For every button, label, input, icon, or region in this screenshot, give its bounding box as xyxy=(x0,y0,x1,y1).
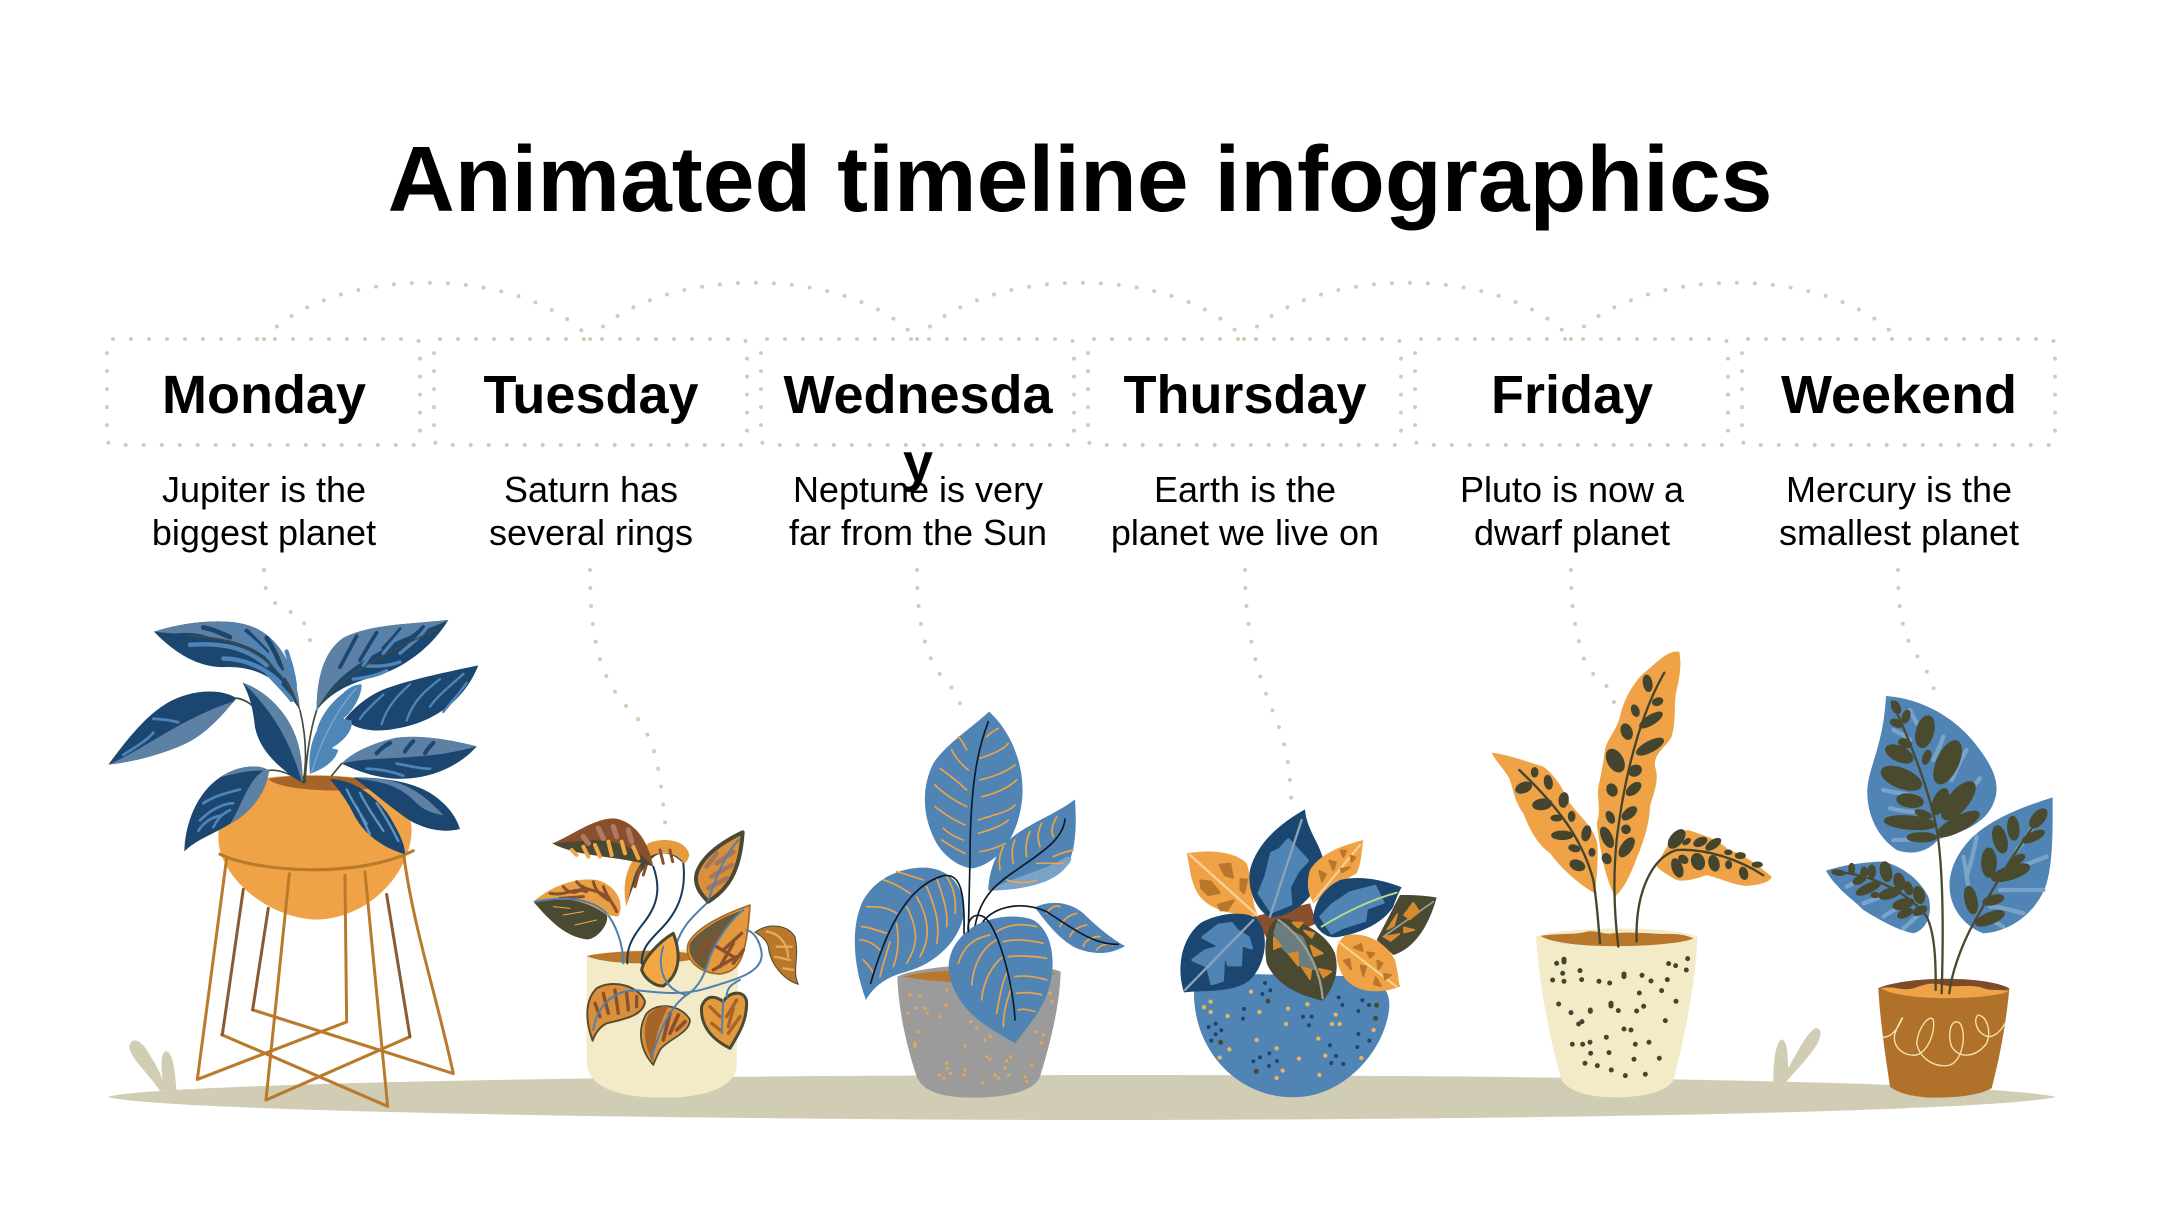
text: Weekend description: smallest planet xyxy=(1779,512,2019,553)
heading: Wednesday (wrapped): y xyxy=(903,433,933,493)
front leaf xyxy=(949,917,1053,1043)
text: Tuesday description: Saturn has xyxy=(504,469,678,510)
plant 5: orange wavy leaves in cream pot xyxy=(1492,652,1772,1097)
text: Thursday description: planet we live on xyxy=(1111,512,1379,553)
heading: Tuesday: Tuesday xyxy=(483,365,699,425)
dotted connectors from text to plants xyxy=(264,570,1938,840)
orange veins on back leaves xyxy=(860,728,1113,977)
leaves xyxy=(1826,696,2053,933)
pot: grey speckled xyxy=(897,965,1061,1098)
text: Monday description: Jupiter is the xyxy=(162,469,366,510)
stems xyxy=(1519,673,1763,947)
pot swirl decoration xyxy=(1883,1015,2005,1066)
pot: cream xyxy=(587,949,738,1098)
pot: cream speckled xyxy=(1536,929,1697,1097)
pot: orange bowl xyxy=(218,775,412,920)
leaves xyxy=(533,818,798,1065)
heading: Monday: Monday xyxy=(162,365,366,425)
dotted arcs connecting the days xyxy=(264,283,1898,339)
light leaf stripes xyxy=(1847,710,2047,928)
pot speckles xyxy=(1204,992,1374,1078)
black stems xyxy=(871,722,1118,983)
text: Weekend description: Mercury is the xyxy=(1786,469,2012,510)
plant 2: trailing orange-brown pothos in cream pot xyxy=(533,818,798,1098)
plant 6: blue leaves in terracotta pot xyxy=(1826,696,2053,1098)
heading: Thursday: Thursday xyxy=(1123,365,1367,425)
text: Tuesday description: several rings xyxy=(489,512,693,553)
text: Friday description: Pluto is now a xyxy=(1460,469,1684,510)
trailing blue vines xyxy=(535,840,762,1057)
stems xyxy=(1833,702,2043,993)
text: Friday description: dwarf planet xyxy=(1474,512,1670,553)
plant 1: navy leaves in orange pot on wire stand xyxy=(108,620,478,1106)
soil xyxy=(903,970,1057,982)
wire stand xyxy=(197,851,453,1106)
icon: right grass tuft xyxy=(1773,1028,1820,1083)
dotted day boxes xyxy=(107,339,2055,445)
heading: Weekend: Weekend xyxy=(1781,365,2017,425)
soil xyxy=(268,776,383,791)
title: Animated timeline infographics xyxy=(388,127,1772,231)
text: Thursday description: Earth is the xyxy=(1154,469,1336,510)
leaves xyxy=(108,620,478,854)
front leaf veins xyxy=(958,925,1047,1027)
plant 3: blue striped leaves in grey pot xyxy=(855,712,1125,1098)
leaves xyxy=(1492,652,1772,897)
leaves xyxy=(855,712,1125,1000)
dark leaflets xyxy=(1832,700,2049,928)
dark leaflets xyxy=(1514,675,1762,880)
heading: Wednesday (wrapped): Wednesda xyxy=(783,365,1053,425)
brown centre xyxy=(1253,903,1317,943)
pot: blue speckled bowl xyxy=(1194,973,1389,1097)
icon: left grass tuft xyxy=(129,1040,177,1091)
stems xyxy=(607,863,708,963)
ground shadow xyxy=(108,1075,2056,1120)
text: Wednesday description: far from the Sun xyxy=(789,512,1047,553)
pot speckles xyxy=(908,990,1052,1083)
text: Monday description: biggest planet xyxy=(152,512,376,553)
soil xyxy=(1541,931,1693,946)
pot speckles xyxy=(1553,959,1688,1076)
plant 4: mixed leaves in round blue pot xyxy=(1180,809,1437,1097)
pot: terracotta xyxy=(1878,979,2009,1098)
soil xyxy=(1880,984,2008,998)
leaves xyxy=(1187,851,1258,916)
soil xyxy=(587,951,700,963)
heading: Friday: Friday xyxy=(1491,365,1653,425)
text: Wednesday description: Neptune is very xyxy=(793,469,1043,510)
front leaf midrib xyxy=(968,915,1015,1020)
soil rim xyxy=(1878,979,2009,997)
